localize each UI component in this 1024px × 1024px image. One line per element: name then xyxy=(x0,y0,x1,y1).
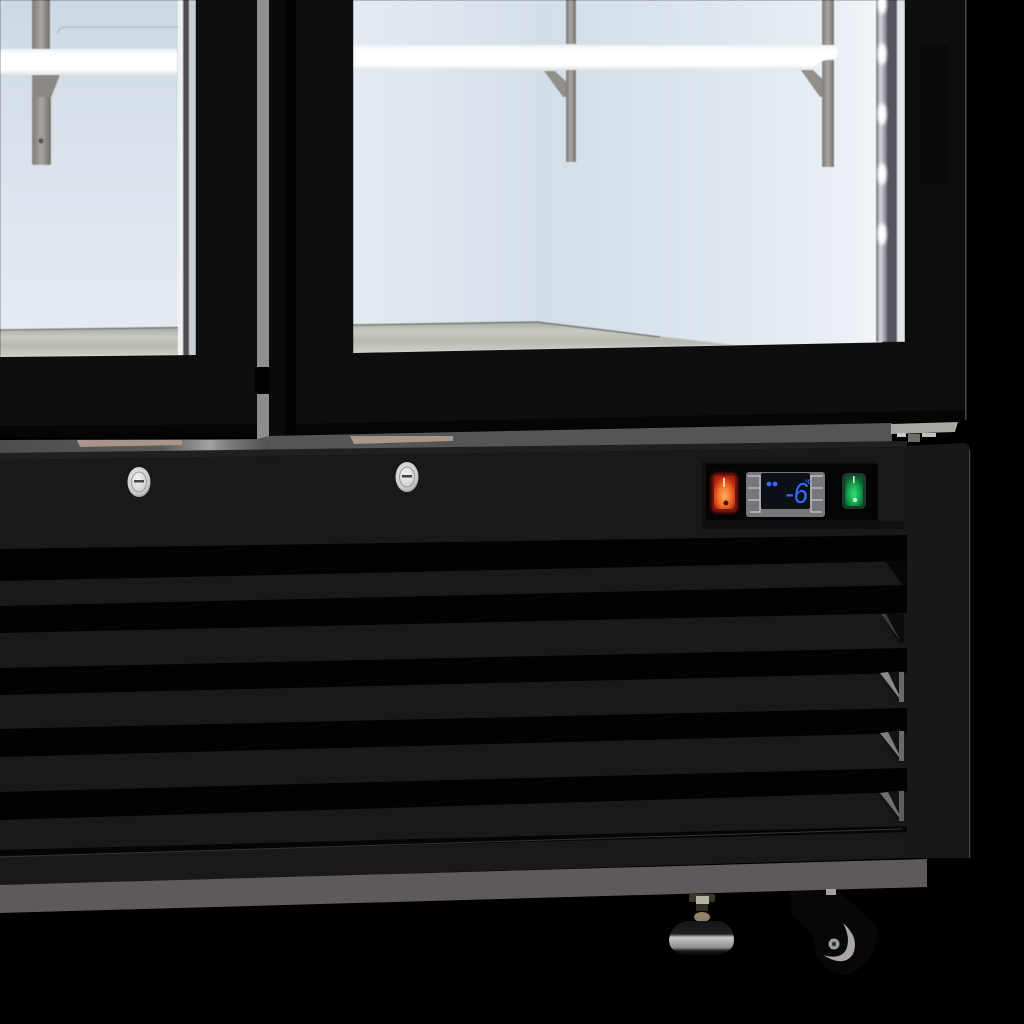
left door edge strip xyxy=(178,0,196,356)
lock left xyxy=(128,467,150,497)
louver 3 end cap xyxy=(878,671,905,704)
front shelf bracket xyxy=(800,0,834,167)
louver 5 end cap xyxy=(876,790,905,823)
hinge right xyxy=(891,422,958,442)
right door edge strip with LED xyxy=(876,0,905,342)
red power switch xyxy=(711,473,738,513)
hinge left xyxy=(77,440,182,447)
right door interior xyxy=(353,0,905,354)
cabinet side panel xyxy=(906,443,970,858)
temperature controller: °C xyxy=(805,480,812,486)
lock right xyxy=(396,462,418,492)
louver 2 end cap xyxy=(880,613,904,643)
cabinet base front xyxy=(0,447,907,886)
caster wheel xyxy=(790,889,877,975)
louver 4 end cap xyxy=(878,730,905,763)
left shelf xyxy=(0,49,177,75)
left door interior xyxy=(0,0,196,358)
status indicators xyxy=(767,482,777,486)
stainless kick plate xyxy=(0,859,927,913)
left door frame xyxy=(0,0,257,437)
green power switch xyxy=(842,473,866,509)
left shelf bracket xyxy=(32,0,60,165)
ventilation louvers xyxy=(0,535,907,857)
right shelf xyxy=(353,45,838,70)
control panel xyxy=(702,462,904,529)
right door frame xyxy=(296,0,966,435)
hinge center xyxy=(350,436,453,444)
back shelf bracket xyxy=(544,0,576,162)
door sill strip xyxy=(0,423,907,460)
temperature readout: -6 xyxy=(785,478,809,510)
left cabinet floor xyxy=(0,328,180,357)
temperature controller xyxy=(746,472,825,517)
louver 1 end cap xyxy=(885,561,907,586)
leveling foot xyxy=(669,894,734,955)
right cabinet floor xyxy=(353,322,735,353)
gap between doors xyxy=(255,0,296,439)
